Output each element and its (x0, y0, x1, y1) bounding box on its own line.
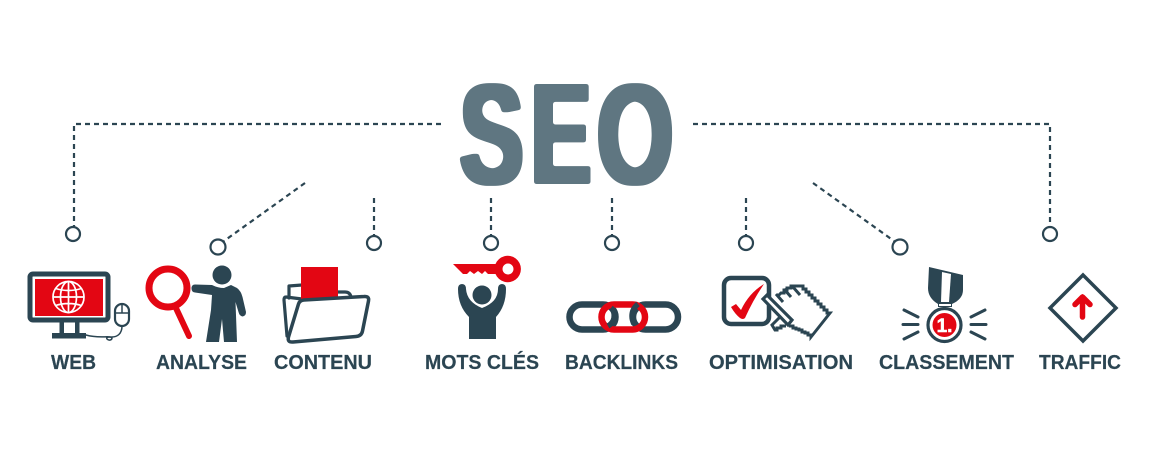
icon: folder (284, 267, 369, 342)
label: backlinks: BACKLINKS (565, 352, 678, 374)
title: SEO: O (597, 54, 673, 214)
connector: web (66, 124, 441, 241)
icon: medal: 1. (937, 316, 952, 337)
icon: magnifier and person (149, 266, 246, 342)
label: traffic: TRAFFIC (1039, 352, 1121, 374)
connector: contenu (367, 198, 381, 250)
connector: mots cles (484, 198, 498, 250)
icon: medal (903, 267, 986, 342)
label: analyse: ANALYSE (156, 352, 247, 374)
icon: checkbox and pointing hand (724, 278, 830, 337)
label: contenu: CONTENU (274, 352, 372, 374)
icon: monitor with globe and mouse (30, 274, 129, 340)
connector: backlinks (605, 198, 619, 250)
icon: key and person (453, 256, 521, 339)
title: SEO: E (531, 55, 591, 214)
icon: chain links (570, 304, 678, 330)
connector: analyse (210, 183, 305, 254)
label: classement: CLASSEMENT (879, 352, 1014, 374)
title: SEO: S (460, 54, 523, 214)
connector: optimisation (739, 198, 753, 250)
label: optimisation: OPTIMISATION (709, 352, 853, 374)
label: web: WEB (51, 352, 96, 374)
connector: classement (813, 183, 908, 254)
label: mots cles: MOTS CLÉS (425, 351, 539, 374)
title: SEO (460, 54, 673, 214)
icon: diamond with up arrow (1050, 275, 1116, 341)
connector: traffic (693, 124, 1057, 241)
